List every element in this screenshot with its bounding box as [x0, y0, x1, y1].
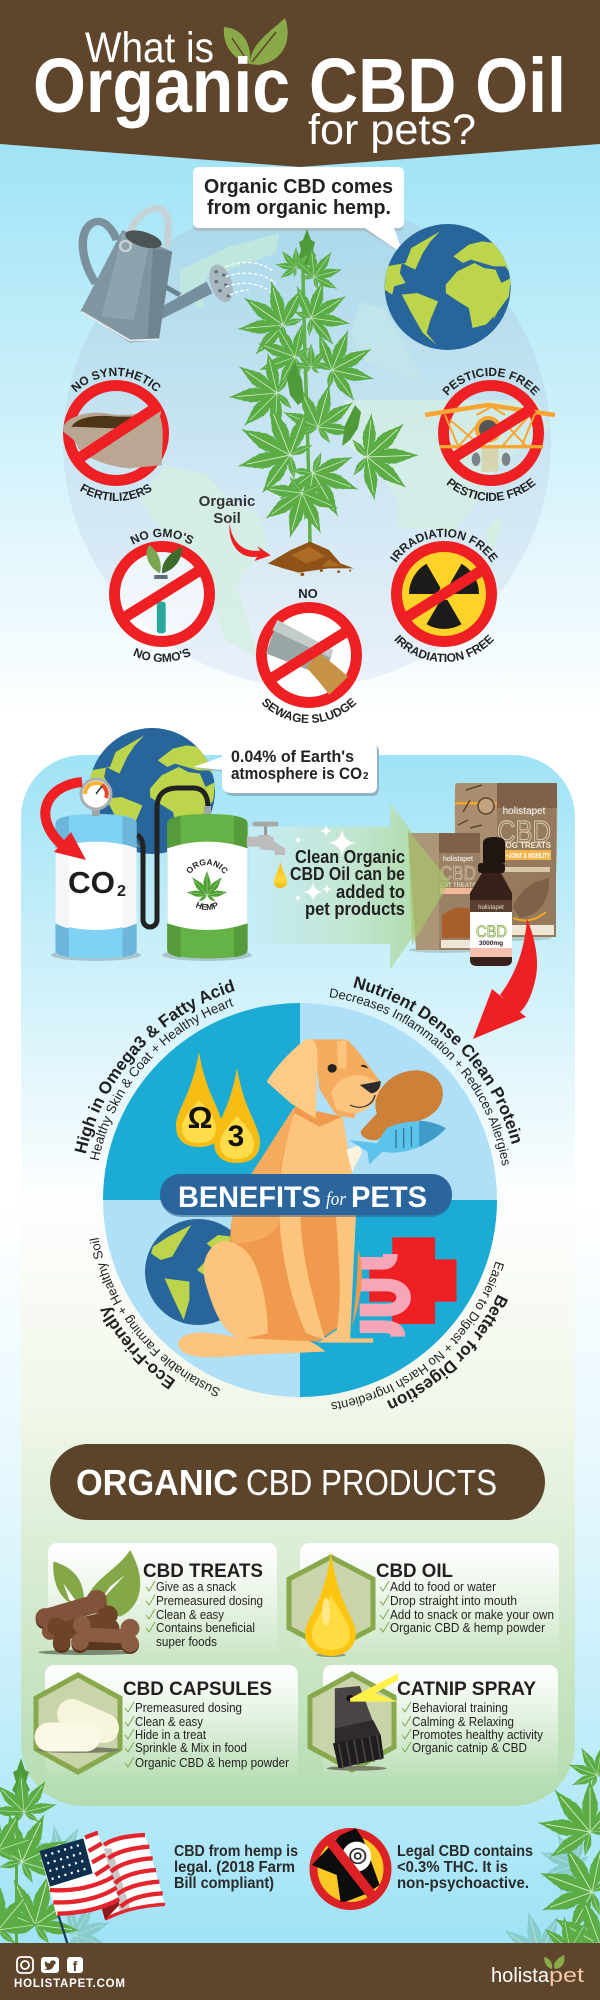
hemp plants: bottom left [0, 1758, 121, 1969]
arrow: organic soil [229, 523, 271, 561]
text: clean organic cbd oil: Clean Organic [295, 847, 405, 867]
sparkles [294, 825, 356, 902]
checklist: cbd treats: super foods [156, 1634, 217, 1649]
icon: pressure gauge [81, 779, 111, 816]
checklist: cbd oil: Add to food or water [390, 1579, 497, 1594]
globe illustration [385, 224, 513, 350]
checklist: cbd capsules [125, 1700, 290, 1770]
card: cbd oil [289, 1543, 559, 1657]
logo: holistapet: pet [549, 1964, 584, 1987]
tank: CO2: CO [68, 865, 115, 900]
icon: omega 3 drops: 3 [228, 1120, 244, 1153]
benefits wheel [103, 1003, 497, 1397]
tube connecting tanks [137, 788, 208, 927]
banner: benefits for pets: for [326, 1189, 347, 1210]
sign: no synthetic fertilizers: NO SYNTHETIC [70, 368, 160, 392]
text: clean organic cbd oil: added to [336, 882, 405, 902]
text: legal thc [397, 1843, 533, 1892]
icon: facebook: f [73, 1958, 78, 1974]
speech bubble: organic hemp: Organic CBD comes [204, 176, 393, 198]
quadrant: top right [300, 1003, 497, 1200]
checklist: cbd capsules: Hide in a treat [135, 1727, 206, 1742]
product: dog treats bag [455, 783, 557, 941]
speech bubble: organic hemp [193, 167, 404, 254]
checklist: cbd treats: Premeasured dosing [156, 1593, 263, 1608]
heading pill: organic cbd products: CBD PRODUCTS [246, 1462, 497, 1503]
checklist: cbd treats: Contains beneficial [156, 1620, 255, 1635]
callout: CO2 atmosphere: atmosphere is CO [231, 765, 362, 783]
checklist: cbd oil: Organic CBD & hemp powder [390, 1620, 546, 1635]
product: CBD dropper bottle: CBD [476, 922, 507, 941]
text: clean organic cbd oil: CBD Oil can be [290, 864, 405, 884]
sign: pesticide free [424, 368, 556, 502]
icon: american flag [39, 1832, 165, 1943]
text: clean organic cbd oil: pet products [305, 899, 405, 919]
text: clean organic cbd oil [290, 847, 405, 919]
card: cbd capsules [36, 1665, 298, 1780]
card: cbd treats: CBD TREATS [143, 1561, 263, 1582]
title: for pets? [308, 106, 476, 154]
footer [0, 1943, 600, 2000]
header banner [0, 0, 600, 167]
card: cbd treats [36, 1543, 277, 1655]
text: hemp legal [174, 1843, 298, 1892]
quadrant: bottom left [103, 1200, 300, 1397]
curved benefit: eco friendly: Eco-Friendly [100, 1308, 176, 1390]
tank: organic hemp: HEMP [196, 902, 218, 910]
curved benefit: eco friendly: Sustainable Farming + Healthy Soil [89, 1238, 220, 1396]
sign: no synthetic fertilizers [63, 368, 169, 501]
label: organic soil: Soil [213, 510, 241, 527]
product: cat treats bag: holistapet [443, 856, 473, 863]
icon: twitter [41, 1957, 59, 1973]
icon: faucet [247, 822, 285, 855]
sign: no sewage sludge [256, 586, 362, 724]
product: dog treats bag: DOG TREATS [500, 840, 551, 850]
heading pill: organic cbd products: ORGANIC [76, 1462, 238, 1503]
banner: benefits for pets: PETS [351, 1181, 427, 1214]
checklist: catnip spray: Behavioral training [412, 1700, 508, 1715]
panel: rounded process and benefits section [21, 755, 575, 1806]
icon: watering can [80, 208, 276, 343]
product: CBD dropper bottle: holistapet [478, 905, 504, 911]
icon: omega 3 drops [176, 1052, 260, 1163]
footer: HOLISTAPET.COM [14, 1978, 125, 1990]
sign: pesticide free: PESTICIDE FREE [442, 368, 540, 396]
tank: organic hemp: ORGANIC [186, 859, 228, 874]
icon: hexagon and oil drop [289, 1551, 373, 1657]
card: cbd oil: CBD OIL [376, 1561, 453, 1582]
icon: fertilizer bag [63, 409, 163, 468]
checklist: cbd oil: Drop straight into mouth [390, 1593, 517, 1608]
product: dog treats bag: +JOINT & MOBILITY [506, 853, 550, 860]
icon: title leaves [224, 18, 288, 65]
card: catnip spray: CATNIP SPRAY [397, 1679, 536, 1700]
product: cat treats bag: CAT TREATS [440, 882, 477, 889]
pet products [408, 783, 557, 966]
text: legal thc: non-psychoactive. [397, 1875, 529, 1892]
checklist: catnip spray: Promotes healthy activity [412, 1727, 543, 1742]
text: legal thc: Legal CBD contains [397, 1843, 533, 1860]
heading pill: organic cbd products [50, 1444, 545, 1520]
icon: instagram [17, 1957, 33, 1973]
speech bubble: organic hemp: from organic hemp. [207, 197, 391, 219]
icon: test tube with seedling [147, 545, 182, 633]
text: legal thc: <0.3% THC. It is [397, 1859, 508, 1876]
product: dog treats bag: holistapet [503, 806, 546, 817]
sign: pesticide free: PESTICIDE FREE [446, 478, 536, 502]
checklist: cbd capsules: Premeasured dosing [135, 1700, 242, 1715]
tank: CO2 [51, 779, 141, 961]
checklist: cbd oil: Add to snack or make your own [390, 1607, 554, 1622]
organic soil mound [268, 542, 354, 576]
sign: no sewage sludge: NO [298, 586, 318, 601]
sign: irradiation free: IRRADIATION FREE [390, 528, 498, 562]
curved benefit: omega 3: Healthy Skin & Coat + Healthy Heart [90, 998, 234, 1160]
logo: holistapet [491, 1955, 584, 1987]
icon: digestive health cross and intestines [360, 1237, 457, 1337]
card: catnip spray [310, 1665, 558, 1780]
banner: benefits for pets [160, 1174, 452, 1217]
sign: irradiation free [390, 528, 498, 662]
curved benefit: digestion: Better for Digestion [387, 1294, 508, 1408]
product: CBD dropper bottle: 3000mg [479, 940, 503, 947]
label: organic soil: Organic [199, 493, 255, 510]
arrow: large green to pet products [249, 803, 450, 970]
checklist: cbd capsules: Sprinkle & Mix in food [135, 1740, 247, 1755]
sign: no GMO: NO GMO'S [130, 528, 194, 544]
text: hemp legal: legal. (2018 Farm [174, 1859, 295, 1876]
checklist: catnip spray [402, 1700, 543, 1755]
tank: organic hemp [162, 806, 252, 961]
title: What is [85, 24, 214, 72]
icon: sewage pipe [266, 620, 348, 695]
tank: CO2: 2 [117, 883, 126, 900]
sign: irradiation free: IRRADIATION FREE [394, 634, 494, 662]
translucent arrow tip over bag [408, 830, 450, 945]
icon: oil drop [274, 862, 287, 888]
hemp plant [218, 229, 420, 548]
icon: facebook [67, 1957, 83, 1974]
icon: small earth [145, 1219, 251, 1325]
icon: hexagon and capsules [36, 1675, 120, 1772]
checklist: catnip spray: Organic catnip & CBD [412, 1740, 527, 1755]
card: cbd capsules: CBD CAPSULES [123, 1679, 272, 1700]
icon: hexagon and spray bottle [310, 1673, 398, 1771]
checklist: cbd capsules: Clean & easy [135, 1714, 203, 1729]
checklist: cbd treats [146, 1579, 263, 1649]
icon: dog [178, 1039, 381, 1357]
icon: chicken drumstick and fish [346, 1070, 446, 1172]
curved benefit: protein: Nutrient Dense Clean Protein [354, 976, 520, 1144]
icon: omega 3 drops: Ω [188, 1100, 212, 1135]
quadrant: bottom right [300, 1200, 497, 1397]
product: CBD dropper bottle [470, 837, 512, 966]
arrow: red curved into CO2 tank [45, 782, 86, 860]
globe behind tanks [89, 728, 217, 854]
callout: CO2 atmosphere: 0.04% of Earth's [231, 748, 354, 766]
callout: CO2 atmosphere [193, 743, 379, 796]
text: hemp legal: Bill compliant) [174, 1875, 274, 1892]
checklist: cbd oil [380, 1579, 554, 1635]
title [33, 18, 566, 154]
checklist: cbd capsules: Organic CBD & hemp powder [135, 1755, 290, 1770]
label: organic soil [199, 493, 255, 527]
callout: CO2 atmosphere: 2 [363, 771, 369, 782]
text: hemp legal: CBD from hemp is [174, 1843, 298, 1860]
icon: radiation trefoil [409, 564, 479, 629]
top flower of hemp plant [299, 229, 316, 270]
icon: no psychoactive dog sign [312, 1828, 388, 1906]
sign: no GMO [109, 528, 215, 662]
icon: leaves and bones [36, 1550, 140, 1655]
icon: crop duster plane [425, 405, 555, 472]
curved benefit: omega 3: High in Omega3 & Fatty Acid [74, 979, 235, 1154]
curved benefit: digestion: Easier to Digest + No Harsh Ingredients [331, 1262, 504, 1410]
side buds of hemp plant [287, 362, 304, 405]
banner: benefits for pets: BENEFITS [178, 1181, 321, 1214]
checklist: cbd treats: Give as a snack [156, 1579, 236, 1594]
checklist: cbd treats: Clean & easy [156, 1607, 224, 1622]
quadrant: top left [103, 1003, 300, 1200]
faint background globe [63, 199, 551, 687]
arrow: red curved to benefits [473, 918, 537, 1039]
sign: no synthetic fertilizers: FERTILIZERS [80, 484, 152, 501]
checklist: catnip spray: Calming & Relaxing [412, 1714, 514, 1729]
sign: no sewage sludge: SEWAGE SLUDGE [262, 698, 357, 724]
sign: no GMO: NO GMO'S [133, 648, 190, 662]
product: cat treats bag [408, 833, 481, 953]
logo: holistapet: holista [491, 1964, 550, 1987]
product: dog treats bag: CBD [497, 814, 551, 849]
curved benefit: protein: Decreases Inflammation + Reduces Allergies [330, 988, 509, 1166]
hemp plants: bottom right [491, 1734, 600, 1993]
product: cat treats bag: CBD [440, 863, 476, 885]
